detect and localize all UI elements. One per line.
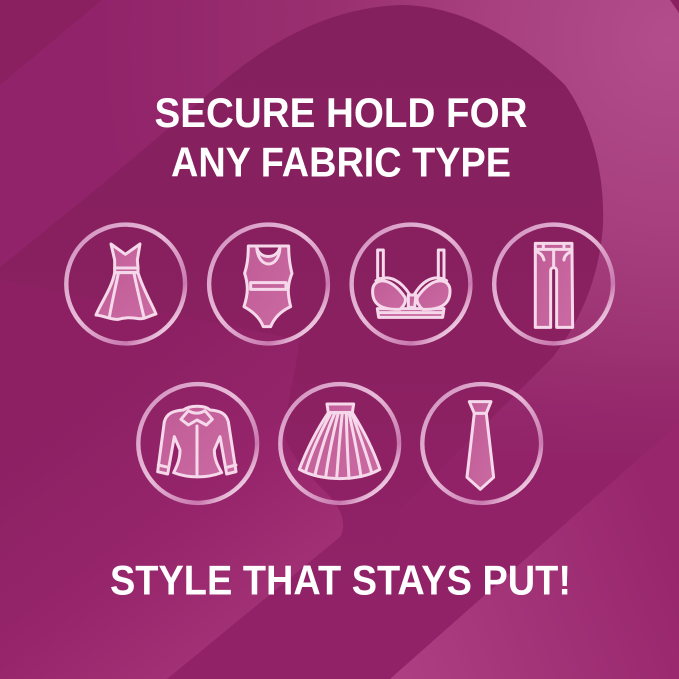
- title: SECURE HOLD FOR: [154, 89, 528, 136]
- title: ANY FABRIC TYPE: [171, 138, 511, 186]
- icon: bodysuit: [209, 225, 328, 343]
- icon: skirt: [280, 384, 399, 503]
- title: [154, 89, 528, 186]
- icon: tie: [422, 384, 541, 503]
- icon: trousers: [494, 225, 613, 343]
- tagline: STYLE THAT STAYS PUT!: [110, 556, 571, 604]
- icon: shirt: [138, 384, 257, 503]
- icon: bra: [352, 225, 470, 343]
- icon: dress: [66, 225, 185, 343]
